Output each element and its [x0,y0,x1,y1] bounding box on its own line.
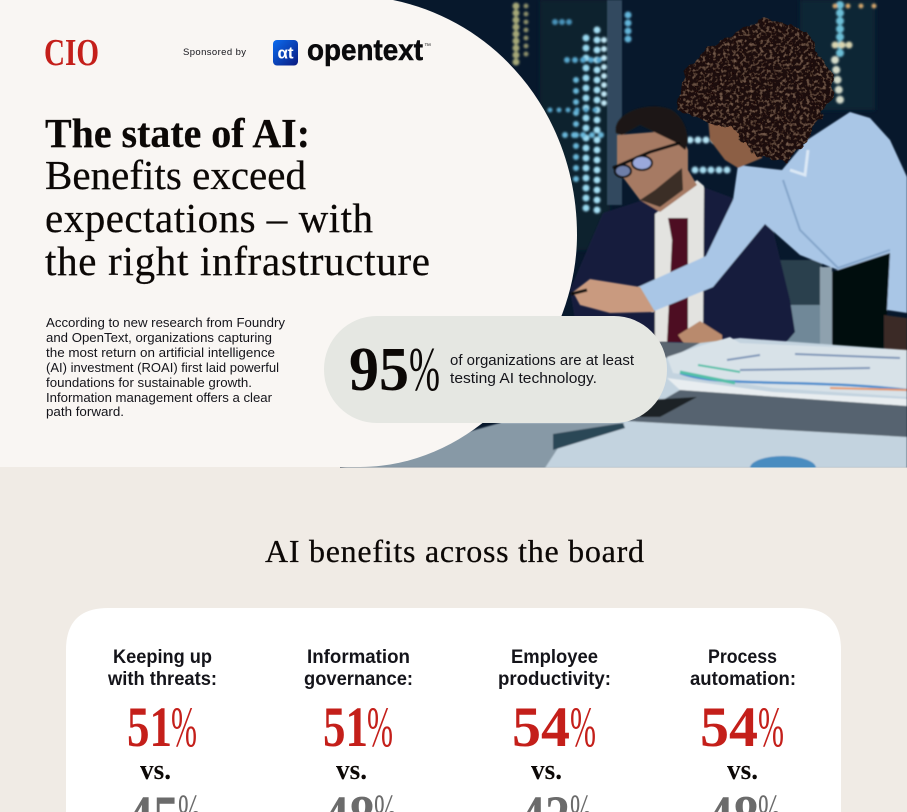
man face [617,130,697,212]
title: the right infrastructure [45,238,430,284]
column: process automation: % [758,696,784,759]
table chart paper [667,337,907,397]
column: employee productivity: 54 [512,696,570,759]
column: employee productivity: productivity: [498,669,611,690]
man suit [570,187,795,346]
callout: 95 percent stat: 95 [349,336,409,404]
column: employee productivity: % [570,696,596,759]
title: expectations – with [45,195,373,241]
CIO logo: CIO [44,32,99,74]
column: information governance: % [367,696,393,759]
intro paragraph: and OpenText, organizations capturing [46,330,272,345]
column: information governance: Information [307,647,410,668]
laptop edge [660,342,700,358]
city lights [512,6,520,68]
callout: 95 percent stat: % [409,336,440,404]
callout: 95 percent stat: testing AI technology. [450,370,597,387]
opentext logo: αt [277,44,294,62]
woman wrist [884,315,907,352]
intro paragraph: the most return on artificial intelligence [46,345,275,360]
column: keeping up with threats: with threats: [107,669,217,690]
column: process automation: Process [708,647,777,668]
table [340,338,907,468]
column: information governance: governance: [304,669,413,690]
opentext logo: opentext [307,34,423,67]
column: keeping up with threats: 51 [127,696,172,759]
photo: two colleagues reviewing charts at night [340,0,907,480]
tie [667,218,688,342]
column: keeping up with threats [107,647,217,812]
intro paragraph: According to new research from Foundry [46,315,286,330]
column: keeping up with threats: Keeping up [113,647,212,668]
column: keeping up with threats: vs. [140,754,171,786]
column: information governance: vs. [336,754,367,786]
intro paragraph [46,315,286,419]
lower section background [0,467,907,812]
intro paragraph: Information management offers a clear [46,390,273,405]
column: employee productivity [498,647,611,812]
column: employee productivity: Employee [511,647,598,668]
back wall column [780,260,822,305]
column: information governance: 51 [323,696,368,759]
column: process automation: automation: [690,669,796,690]
man hand [678,321,722,345]
blue disc on table [750,455,816,468]
callout: 95 percent stat: of organizations are at least [450,352,635,369]
woman curly hair [677,17,833,163]
column: employee productivity: vs. [531,754,562,786]
title: The state of AI: [45,110,310,156]
sponsored by label: Sponsored by [183,47,246,58]
shirt [655,180,704,342]
column: process automation [690,647,796,812]
intro paragraph: (AI) investment (ROAI) first laid powerful [46,360,279,375]
title: Benefits exceed [45,152,306,198]
column: information governance [304,647,413,812]
woman pants [832,252,890,352]
woman hand with pen [573,279,655,313]
column: keeping up with threats: % [171,696,197,759]
column: process automation: vs. [727,754,758,786]
column: process automation: 54 [700,696,758,759]
woman face [708,118,762,168]
panel: benefits card [66,608,841,812]
intro paragraph: path forward. [46,404,124,419]
cream header panel [0,0,577,467]
section heading: AI benefits across the board [265,533,644,569]
glasses [613,143,680,177]
man hair [616,106,687,150]
blurred glassware [340,423,625,468]
callout: 95 percent stat [324,316,667,423]
woman shirt [638,112,907,313]
intro paragraph: foundations for sustainable growth. [46,375,252,390]
opentext logo: ™ [424,43,431,50]
table edge [667,378,907,406]
title [45,110,430,284]
